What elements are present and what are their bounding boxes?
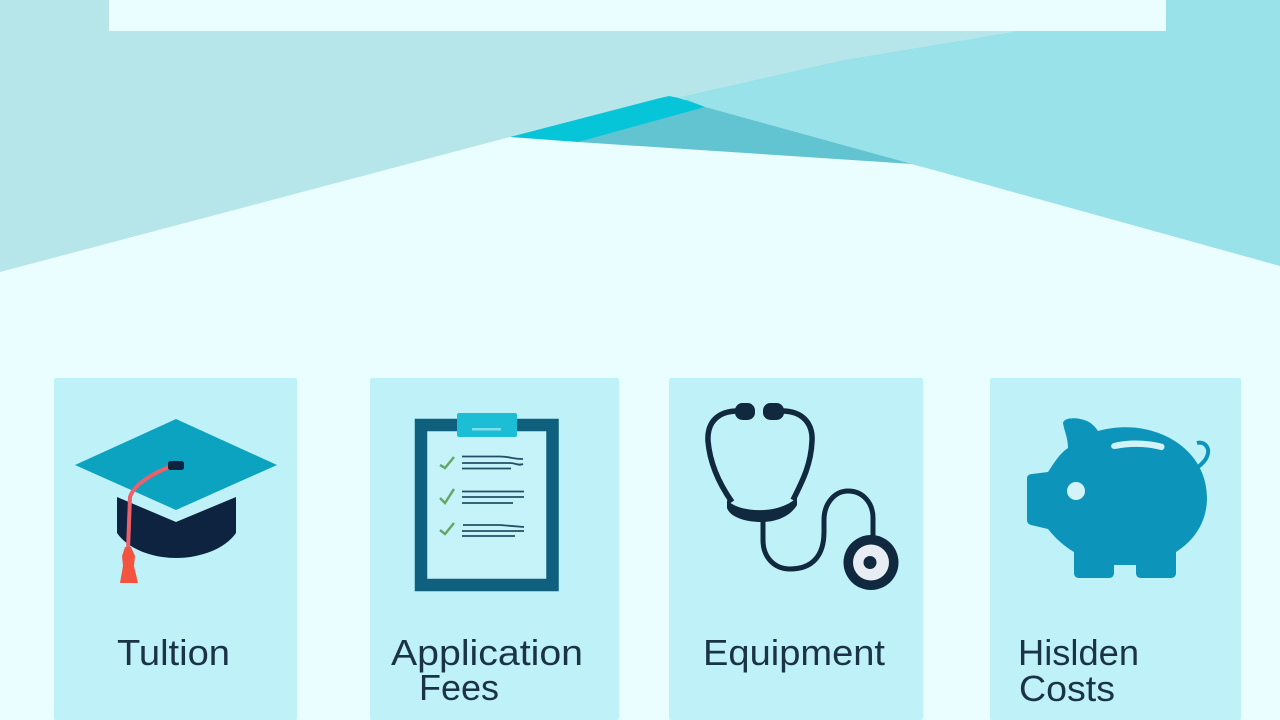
panel: hidden costs xyxy=(990,378,1241,720)
icon: piggy bank xyxy=(1027,418,1208,578)
label: hidden costs: Hislden xyxy=(1018,632,1139,673)
panel: application fees xyxy=(370,378,619,720)
icon: graduation cap xyxy=(75,419,277,583)
icon: stethoscope xyxy=(708,403,898,590)
panel: tuition xyxy=(54,378,297,720)
label: hidden costs: Costs xyxy=(1019,668,1115,709)
header background: left facet xyxy=(0,0,1280,272)
label: application fees: Fees xyxy=(419,667,499,708)
label: equipment: Equipment xyxy=(703,632,885,673)
label: tuition: Tultion xyxy=(117,632,230,673)
accent triangle: bright cyan xyxy=(510,96,705,142)
label: application fees xyxy=(391,632,583,708)
header background: right facet xyxy=(680,0,1280,266)
title panel xyxy=(109,0,1166,31)
label: hidden costs xyxy=(1018,632,1139,709)
label: application fees: Application xyxy=(391,632,583,673)
panel: equipment xyxy=(669,378,923,720)
accent triangle: teal xyxy=(578,98,925,168)
icon: clipboard xyxy=(421,413,552,585)
